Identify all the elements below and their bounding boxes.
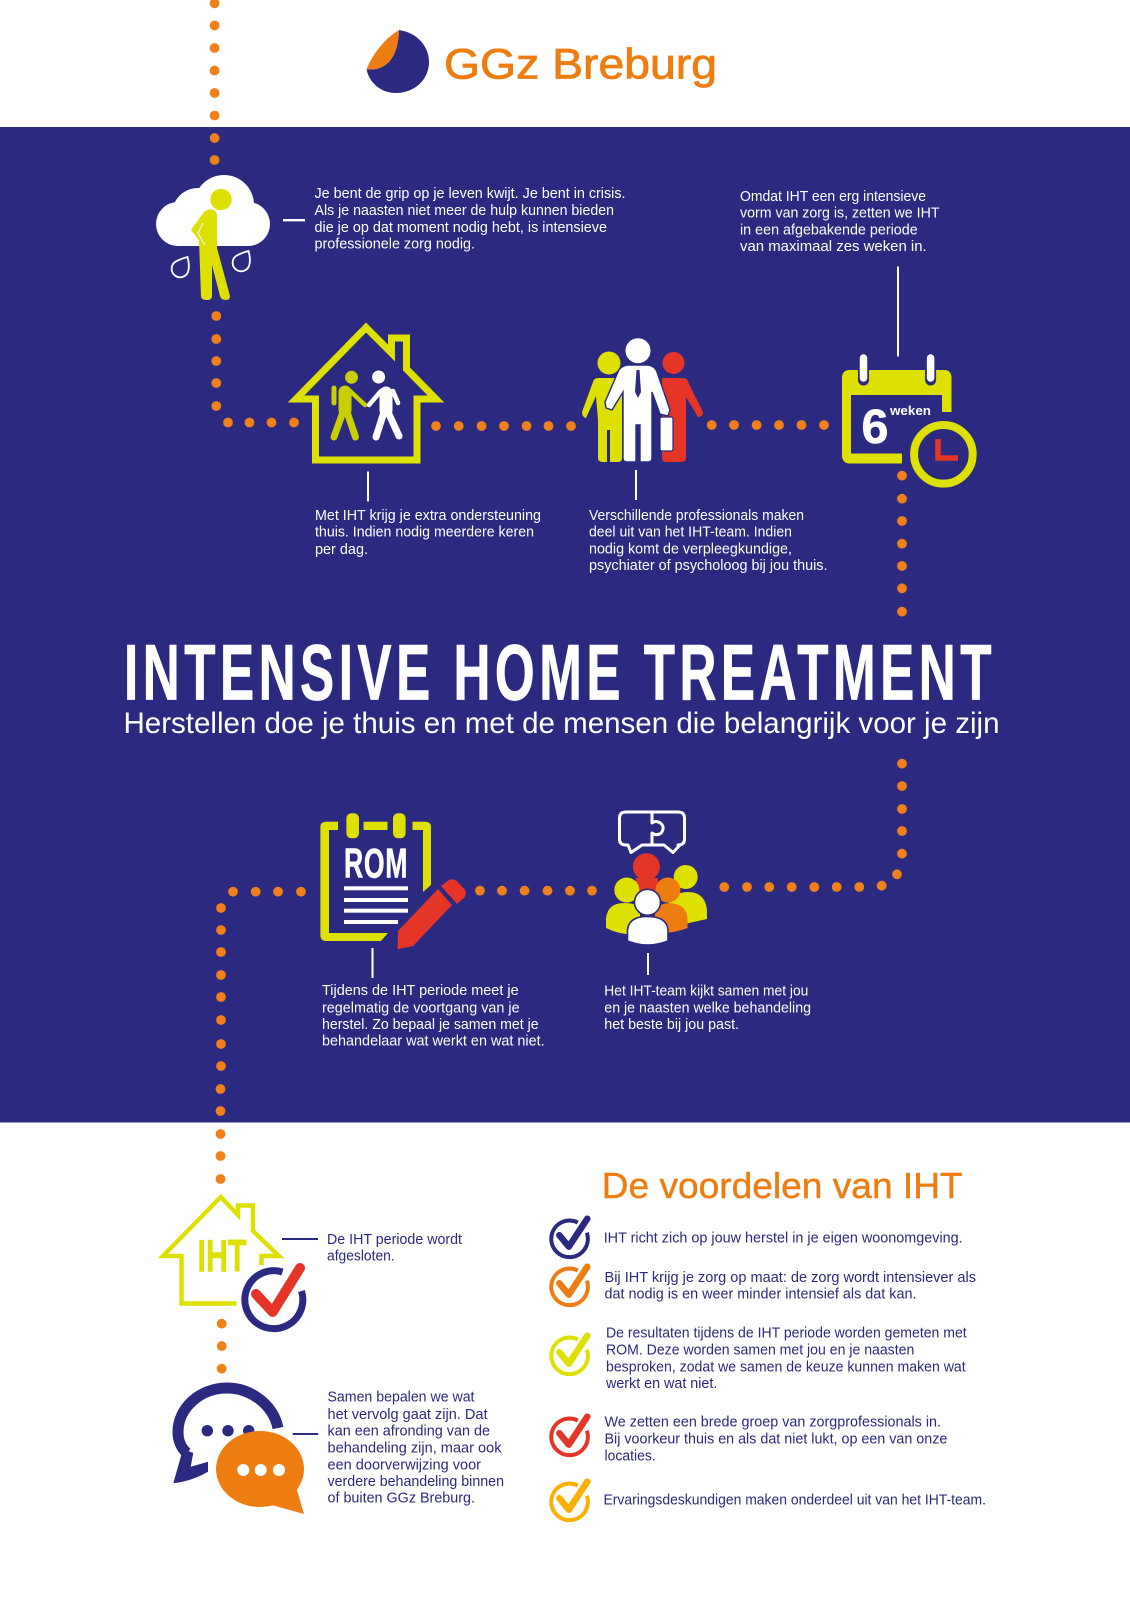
text: team meeting: het beste bij jou past. xyxy=(604,1017,739,1033)
check ring xyxy=(245,1271,303,1329)
text: professionals: Verschillende professionals maken xyxy=(589,508,804,524)
connector: house xyxy=(367,472,369,502)
icon: chat bubbles xyxy=(173,1388,304,1514)
check icon red xyxy=(551,1417,588,1455)
lime person xyxy=(582,352,622,462)
red person xyxy=(633,853,660,900)
text: ROM: behandelaar wat werkt en wat niet. xyxy=(322,1034,545,1050)
benefit 2 xyxy=(551,1267,976,1305)
text: follow-up: het vervolg gaat zijn. Dat xyxy=(328,1407,488,1423)
text: IHT closed: De IHT periode wordt xyxy=(327,1232,462,1248)
lime person left xyxy=(606,878,640,934)
check icon orange xyxy=(551,1267,588,1305)
orange person xyxy=(655,878,688,933)
text: six weeks: van maximaal zes weken in. xyxy=(740,239,927,255)
text: IHT closed: afgesloten. xyxy=(327,1249,395,1265)
subtitle: Herstellen doe je thuis en met de mensen die belangrijk voor je zijn xyxy=(124,707,1000,740)
clock xyxy=(914,425,973,484)
text: follow-up: een doorverwijzing voor xyxy=(328,1457,481,1473)
person with backpack xyxy=(334,371,365,437)
check icon navy xyxy=(551,1219,588,1257)
text: locaties. xyxy=(604,1448,656,1464)
text: home support: Met IHT krijg je extra ondersteuning xyxy=(315,508,541,524)
text: team meeting xyxy=(604,983,811,1033)
calendar xyxy=(842,370,952,464)
text: six weeks: Omdat IHT een erg intensieve xyxy=(740,189,926,205)
person xyxy=(191,189,232,300)
text: ROM: herstel. Zo bepaal je samen met je xyxy=(322,1017,539,1033)
professional xyxy=(369,370,399,437)
text: follow-up xyxy=(328,1390,504,1507)
text: professionals: nodig komt de verpleegkundige, xyxy=(589,542,792,558)
icon: ROM clipboard and pencil xyxy=(320,813,466,949)
text: Ervaringsdeskundigen maken onderdeel uit van het IHT-team. xyxy=(604,1492,986,1508)
text: professionals xyxy=(589,508,828,574)
text xyxy=(605,1326,967,1392)
cloud xyxy=(156,175,270,246)
white person xyxy=(628,889,668,945)
pencil xyxy=(398,879,466,949)
text: werkt en wat niet. xyxy=(605,1376,717,1392)
text: team meeting: Het IHT-team kijkt samen met jou xyxy=(604,983,808,999)
text: follow-up: Samen bepalen we wat xyxy=(328,1390,474,1406)
rain drops xyxy=(172,251,250,277)
text: home support xyxy=(315,508,541,558)
text: follow-up: verdere behandeling binnen xyxy=(328,1474,504,1490)
text: crisis: die je op dat moment nodig hebt, is intensieve xyxy=(314,220,607,236)
logo wordmark: GGz Breburg xyxy=(444,40,717,88)
dotted path: cloud to calendar xyxy=(211,311,829,431)
house outline xyxy=(296,328,436,460)
connector: crisis xyxy=(283,219,305,221)
icon: IHT house with check xyxy=(163,1197,303,1329)
clipboard xyxy=(320,822,431,941)
text: Bij IHT krijg je zorg op maat: de zorg wordt intensiever als xyxy=(604,1270,976,1286)
label weken: weken xyxy=(889,403,931,418)
label ROM: ROM xyxy=(344,839,408,886)
text: IHT closed xyxy=(327,1232,462,1265)
connector: follow-up xyxy=(293,1433,318,1435)
icon: team meeting xyxy=(606,812,707,945)
icon: calendar six weeks with clock xyxy=(842,358,973,484)
background panel: navy band xyxy=(0,127,1130,1122)
icon: person under rain cloud xyxy=(156,175,270,300)
speech bubbles with puzzle xyxy=(620,812,684,852)
text: crisis xyxy=(314,186,626,252)
benefit 5 xyxy=(551,1482,986,1520)
benefit 4 xyxy=(551,1415,947,1464)
text: six weeks xyxy=(740,189,940,255)
dotted path: calendar down to title xyxy=(897,471,907,617)
number 6: 6 xyxy=(862,401,888,454)
check icon amber xyxy=(551,1482,588,1520)
text: dat nodig is en weer minder intensief als dat kan. xyxy=(604,1287,916,1303)
text: six weeks: in een afgebakende periode xyxy=(740,222,918,238)
heading: De voordelen van IHT: De voordelen van IHT xyxy=(602,1165,963,1206)
text: six weeks: vorm van zorg is, zetten we IHT xyxy=(740,206,940,222)
text xyxy=(604,1270,976,1303)
text: follow-up: of buiten GGz Breburg. xyxy=(328,1491,475,1507)
text: ROM: regelmatig de voortgang van je xyxy=(322,1000,520,1016)
benefit 3 xyxy=(551,1326,967,1392)
check icon lime xyxy=(551,1336,588,1374)
logo mark xyxy=(366,30,429,93)
text: home support: per dag. xyxy=(315,542,368,558)
text: ROM. Deze worden samen met jou en je naasten xyxy=(606,1342,914,1358)
house outline xyxy=(163,1197,279,1304)
text: follow-up: kan een afronding van de xyxy=(328,1424,490,1440)
text: Bij voorkeur thuis en als dat niet lukt, op een van onze xyxy=(604,1432,947,1448)
icon: team of professionals xyxy=(582,338,703,462)
dotted path: team meeting to ROM xyxy=(475,886,597,896)
connector: team xyxy=(635,470,637,500)
text xyxy=(604,1415,947,1464)
benefit 1 xyxy=(551,1219,963,1257)
text: team meeting: en je naasten welke behandeling xyxy=(604,1000,811,1016)
text: ROM: Tijdens de IHT periode meet je xyxy=(322,983,519,999)
text: crisis: professionele zorg nodig. xyxy=(314,236,475,252)
text: professionals: deel uit van het IHT-team. Indien xyxy=(589,525,792,541)
clipboard rings xyxy=(346,813,406,838)
dotted path: ROM to lower section xyxy=(216,887,306,1374)
text: IHT richt zich op jouw herstel in je eigen woonomgeving. xyxy=(604,1230,963,1246)
dotted path: top to cloud xyxy=(210,0,220,165)
label IHT: IHT xyxy=(198,1231,246,1282)
white man in suit xyxy=(605,338,673,462)
text: follow-up: behandeling zijn, maar ook xyxy=(328,1440,502,1456)
lime person right xyxy=(668,865,707,925)
text: besproken, zodat we samen de keuze kunnen maken wat xyxy=(606,1359,966,1375)
connector: six weeks xyxy=(897,266,899,356)
connector: ROM xyxy=(372,948,374,978)
text: ROM xyxy=(322,983,545,1050)
text: home support: thuis. Indien nodig meerdere keren xyxy=(315,525,534,541)
check mark xyxy=(256,1268,300,1312)
text: We zetten een brede groep van zorgprofessionals in. xyxy=(604,1415,941,1431)
text: crisis: Je bent de grip op je leven kwijt. Je bent in crisis. xyxy=(314,186,626,202)
connector: team meeting xyxy=(647,953,649,975)
dotted path: title to team meeting xyxy=(719,759,907,892)
text: De resultaten tijdens de IHT periode worden gemeten met xyxy=(606,1326,967,1342)
logo: GGz Breburg xyxy=(366,30,717,93)
icon: house with two people xyxy=(296,328,436,460)
clipboard lines xyxy=(344,886,408,924)
navy bubble xyxy=(173,1388,278,1483)
orange bubble xyxy=(216,1431,304,1514)
text: crisis: Als je naasten niet meer de hulp kunnen bieden xyxy=(314,203,614,219)
connector: IHT closed xyxy=(282,1238,318,1240)
calendar rings xyxy=(864,358,931,380)
text: professionals: psychiater of psycholoog bij jou thuis. xyxy=(589,558,828,574)
red person xyxy=(660,352,703,462)
